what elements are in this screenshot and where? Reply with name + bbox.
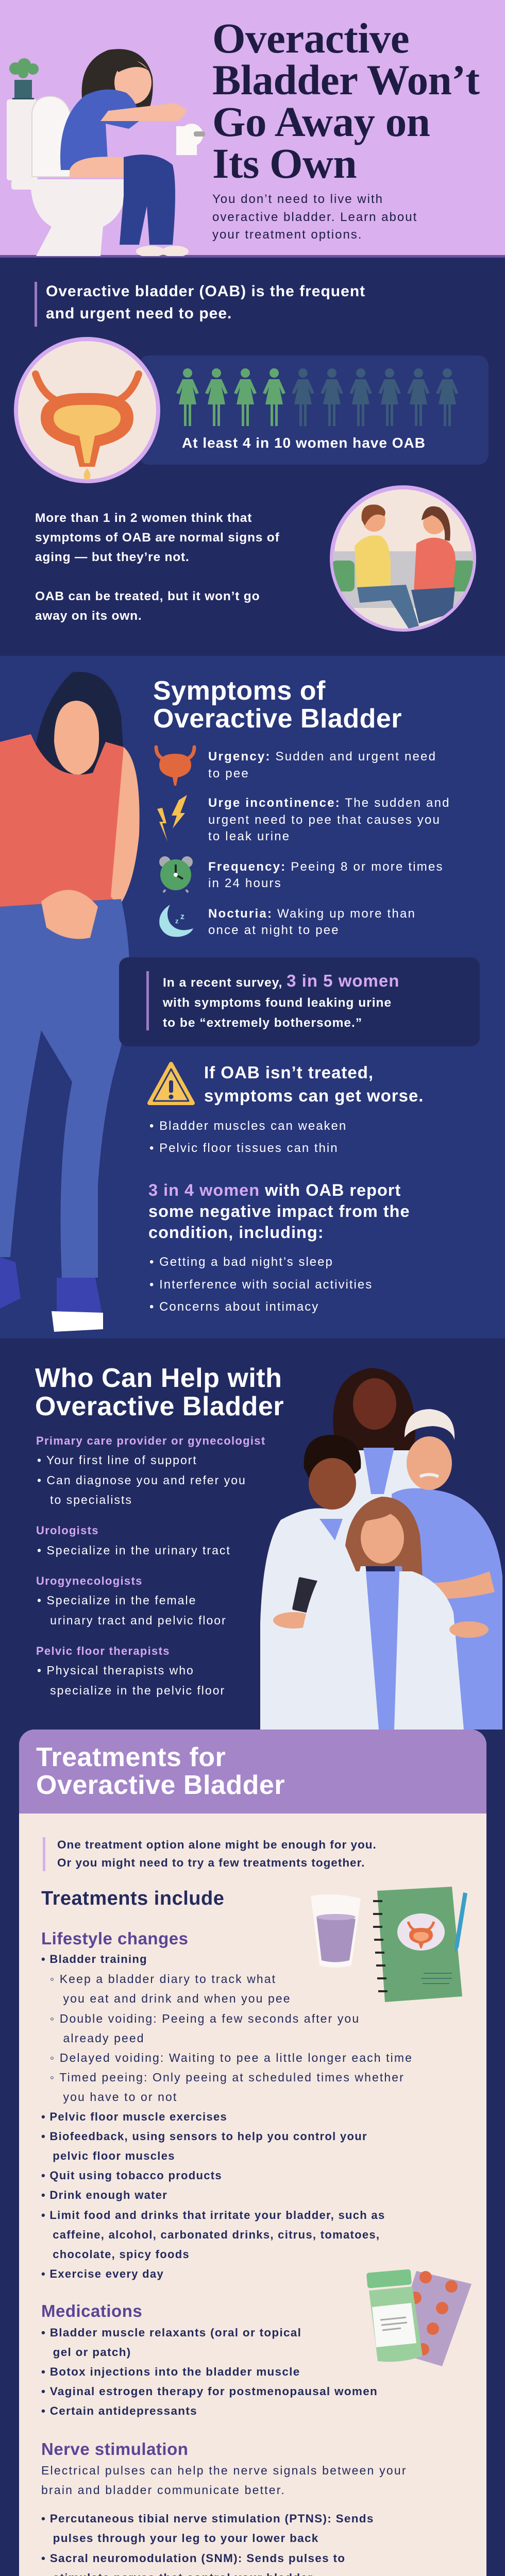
symptom: nocturia: once at night to pee [208,923,340,937]
list: lifestyle changes: • Drink enough water [41,2189,167,2201]
toilet paper [176,124,205,155]
list: lifestyle changes: • Exercise every day [41,2267,164,2280]
icon: bladder diary notebook [373,1887,467,2002]
provider: urogynecologists [36,1574,227,1627]
list: nerve stimulation: • Percutaneous tibial nerve stimulation (PTNS): Sends [41,2512,374,2525]
treatments header: Treatments for [36,1742,226,1772]
illustration: woman on toilet [7,49,205,256]
list: lifestyle changes: • Limit food and drinks that irritate your bladder, such as [41,2209,385,2222]
title: Go Away on [212,98,430,145]
symptom: urge incontinence: Urge incontinence: The sudden and [208,796,450,810]
symptom: frequency: in 24 hours [208,876,282,890]
woman [60,49,189,257]
symptom: urge incontinence: to leak urine [208,829,290,843]
plant [9,58,39,100]
icon: moon: z [180,912,184,921]
impact block: 3 in 4 women: • Interference with social activities [149,1278,373,1291]
icon: glass of water [311,1894,361,1968]
list: lifestyle changes: • Pelvic floor muscle exercises [41,2110,227,2123]
provider list: • Can diagnose you and refer you [37,1473,246,1487]
list: nerve stimulation [41,2512,374,2576]
section: what is OAB [0,258,505,656]
callout: one treatment: Or you might need to try a few treatments together. [57,1856,365,1869]
list: lifestyle changes: ◦ Double voiding: Peeing a few seconds after you [50,2012,360,2025]
warning block: symptoms can get worse. [204,1086,424,1105]
text: misconception: aging — but they’re not. [35,550,190,564]
symptoms title: Symptoms of [153,676,326,706]
warning block: If OAB isn’t treated, [204,1063,374,1082]
impact block: 3 in 4 women: • Getting a bad night’s sleep [149,1255,333,1269]
provider list: Urogynecologists [36,1574,143,1587]
icon: lightning [157,795,187,841]
symptom: urgency: to pee [208,767,249,781]
warning block: • Bladder muscles can weaken [149,1119,347,1133]
toilet [7,96,133,256]
callout: one treatment: One treatment option alone might be enough for you. [57,1838,377,1851]
title: Bladder Won’t [212,56,480,104]
callout: 3 in 5 women [119,957,480,1046]
illustration: woman holding bladder [0,672,140,1332]
icon: two women talking circle [330,485,476,632]
provider list: Primary care provider or gynecologist [36,1434,265,1447]
symptom: urgency: Urgency: Sudden and urgent need [208,750,436,764]
icon: bladder [155,745,196,786]
provider list: Urologists [36,1524,99,1537]
section: symptoms [0,656,505,1338]
stat text: At least 4 in 10 women have OAB [182,435,426,451]
text: treatable: away on its own. [35,609,142,623]
list: nerve stimulation: • Sacral neuromodulation (SNM): Sends pulses to [41,2552,345,2565]
list: medications: • Botox injections into the bladder muscle [41,2365,300,2378]
symptoms title: Overactive Bladder [153,704,402,734]
list: lifestyle changes: ◦ Keep a bladder diary to track what [50,1972,276,1986]
list: lifestyle changes: • Biofeedback, using sensors to help you control your [41,2130,367,2143]
text: misconception: More than 1 in 2 women think that [35,511,252,525]
provider list [36,1434,265,1697]
impact block: 3 in 4 women: • Concerns about intimacy [149,1300,319,1314]
list: medications: • Certain antidepressants [41,2404,197,2417]
section: header [0,0,505,256]
title: Its Own [212,140,357,187]
list: lifestyle changes: pelvic floor muscles [53,2149,175,2162]
heading: nerve stimulation: Nerve stimulation [41,2439,188,2459]
impact block: 3 in 4 women: condition, including: [148,1223,324,1242]
list: lifestyle changes: ◦ Delayed voiding: Waiting to pee a little longer each time [50,2051,413,2064]
impact block: 3 in 4 women [148,1181,410,1314]
list: lifestyle changes: you have to or not [63,2090,177,2104]
symptom: urge incontinence [157,795,450,843]
icon: women figures [176,368,459,426]
title [212,14,480,187]
icon: warning triangle [147,1062,195,1105]
provider: pelvic floor therapists [36,1645,225,1697]
panel: treatments [19,1730,486,2576]
callout: 3 in 5 women: to be “extremely bothersome.” [163,1016,362,1030]
provider list: • Physical therapists who [37,1664,194,1677]
warning block [147,1062,424,1155]
subtitle: You don’t need to live with [212,192,383,206]
symptom: nocturia: Nocturia: Waking up more than [208,907,416,921]
illustration: doctors [260,1368,502,1730]
list: lifestyle changes: already peed [63,2031,145,2045]
list: lifestyle changes: caffeine, alcohol, carbonated drinks, citrus, tomatoes, [53,2228,380,2241]
who can help title: Overactive Bladder [35,1392,284,1421]
text: nerve stimulation intro [41,2464,407,2497]
who can help title [35,1363,284,1421]
section: who can help [0,1338,505,2576]
callout: one treatment [43,1837,377,1871]
provider: urologists [36,1524,231,1557]
definition heading: and urgent need to pee. [46,305,232,322]
provider list: specialize in the pelvic floor [50,1684,225,1697]
icon: moon: z [175,917,179,925]
treatments header [19,1730,486,1814]
list: lifestyle changes [41,1953,413,2280]
callout: 3 in 5 women: with symptoms found leaking urine [163,996,392,1010]
provider list: urinary tract and pelvic floor [50,1614,227,1627]
list: medications: • Bladder muscle relaxants (oral or topical [41,2326,301,2339]
definition heading [35,282,365,327]
icon: moon [159,905,193,937]
text: misconception [35,511,280,564]
symptom: frequency: Frequency: Peeing 8 or more times [208,860,444,874]
provider list: to specialists [50,1493,132,1506]
list: lifestyle changes: you eat and drink and when you pee [63,1992,291,2005]
icon: bladder circle [14,337,160,483]
provider list: • Your first line of support [37,1453,197,1467]
subtitle: your treatment options. [212,228,362,242]
provider list: • Specialize in the urinary tract [37,1544,231,1557]
provider list: Pelvic floor therapists [36,1645,170,1657]
treatments header: Overactive Bladder [36,1770,285,1800]
heading: treatments include: Treatments include [41,1888,224,1909]
text: misconception: symptoms of OAB are normal signs of [35,531,280,545]
icon: pill bottle and blister pack [366,2269,472,2366]
definition heading: Overactive bladder (OAB) is the frequent [46,283,365,300]
list: nerve stimulation: pulses through your leg to your lower back [53,2532,319,2545]
callout: 3 in 5 women: In a recent survey, 3 in 5 women [163,971,399,990]
list: lifestyle changes: ◦ Timed peeing: Only peeing at scheduled times whether [50,2071,405,2084]
heading: medications: Medications [41,2301,142,2320]
symptom: urgency [155,745,436,786]
symptom: frequency [159,856,444,893]
symptom: nocturia [159,905,416,937]
list: lifestyle changes: • Quit using tobacco products [41,2169,222,2182]
impact block: 3 in 4 women: 3 in 4 women with OAB report [148,1181,401,1199]
symptoms title [153,676,402,734]
impact block: 3 in 4 women: some negative impact from the [148,1202,410,1221]
heading: lifestyle changes: Lifestyle changes [41,1929,188,1948]
list: medications: • Vaginal estrogen therapy for postmenopausal women [41,2385,378,2398]
symptom: urge incontinence: urgent need to pee that causes you [208,813,441,826]
text: treatable [35,589,260,623]
subtitle: overactive bladder. Learn about [212,210,417,224]
title: Overactive [212,14,409,62]
text: nerve stimulation intro: Electrical pulses can help the nerve signals between your [41,2464,407,2477]
subtitle [212,192,417,242]
text: treatable: OAB can be treated, but it won’t go [35,589,260,603]
list: lifestyle changes: • Bladder training [41,1953,147,1965]
warning block: • Pelvic floor tissues can thin [149,1141,339,1155]
text: nerve stimulation intro: brain and bladder communicate better. [41,2483,285,2497]
list: medications [41,2326,378,2417]
provider: primary care [36,1434,265,1506]
stat box: 4 in 10 [139,355,489,465]
icon: clock [159,856,193,893]
list: lifestyle changes: chocolate, spicy foods [53,2248,190,2261]
list: medications: gel or patch) [53,2346,131,2359]
who can help title: Who Can Help with [35,1363,282,1393]
provider list: • Specialize in the female [37,1594,196,1607]
